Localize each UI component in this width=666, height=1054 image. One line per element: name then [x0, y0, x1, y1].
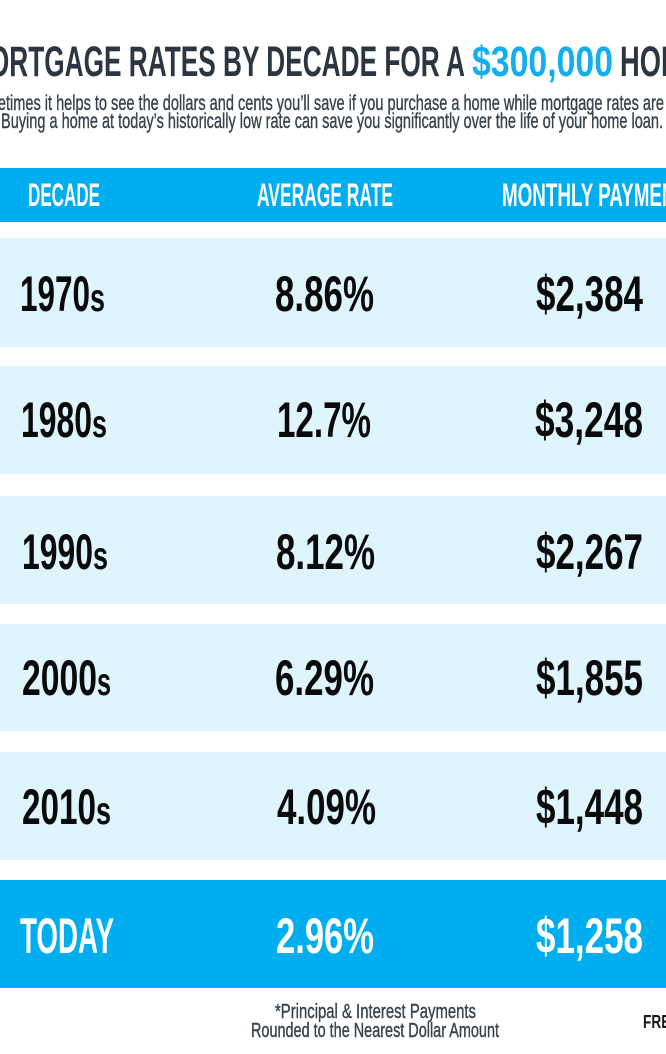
- row: 1970s: [0, 238, 666, 347]
- row: 1990s: 8.12%: [276, 524, 375, 580]
- row: 2010s: 2010: [22, 779, 96, 835]
- table header: [0, 168, 666, 222]
- title: $300,000: [472, 38, 613, 86]
- row: today: [0, 880, 666, 988]
- row: today: 2.96%: [276, 908, 374, 964]
- table header: DECADE: [28, 177, 100, 213]
- table header: AVERAGE RATE: [257, 177, 393, 213]
- row: today: TODAY: [20, 908, 114, 964]
- row: 1990s: 1990: [22, 524, 93, 580]
- footnote: Rounded to the Nearest Dollar Amount: [251, 1020, 499, 1042]
- row: 2010s: [0, 752, 666, 860]
- row: 1970s: 1970: [20, 266, 90, 322]
- row: 2010s: 4.09%: [277, 779, 376, 835]
- row: 2000s: 2000: [22, 650, 97, 706]
- intro text: [0, 92, 666, 133]
- row: 2000s: [0, 624, 666, 731]
- row: 1970s: s: [90, 277, 105, 320]
- row: 1980s: [0, 366, 666, 474]
- row: 1990s: [0, 496, 666, 604]
- footnote: *Principal & Interest Payments: [275, 1001, 476, 1023]
- row: 2000s: s: [97, 661, 111, 704]
- row: 1970s: 8.86%: [275, 266, 374, 322]
- row: 1980s: s: [92, 403, 107, 446]
- row: 2010s: s: [96, 790, 111, 833]
- row: 1990s: s: [93, 535, 108, 578]
- footnote: [251, 1001, 499, 1042]
- row: 1980s: 1980: [21, 392, 92, 448]
- row: 1980s: 12.7%: [277, 392, 371, 448]
- row: 2000s: 6.29%: [275, 650, 374, 706]
